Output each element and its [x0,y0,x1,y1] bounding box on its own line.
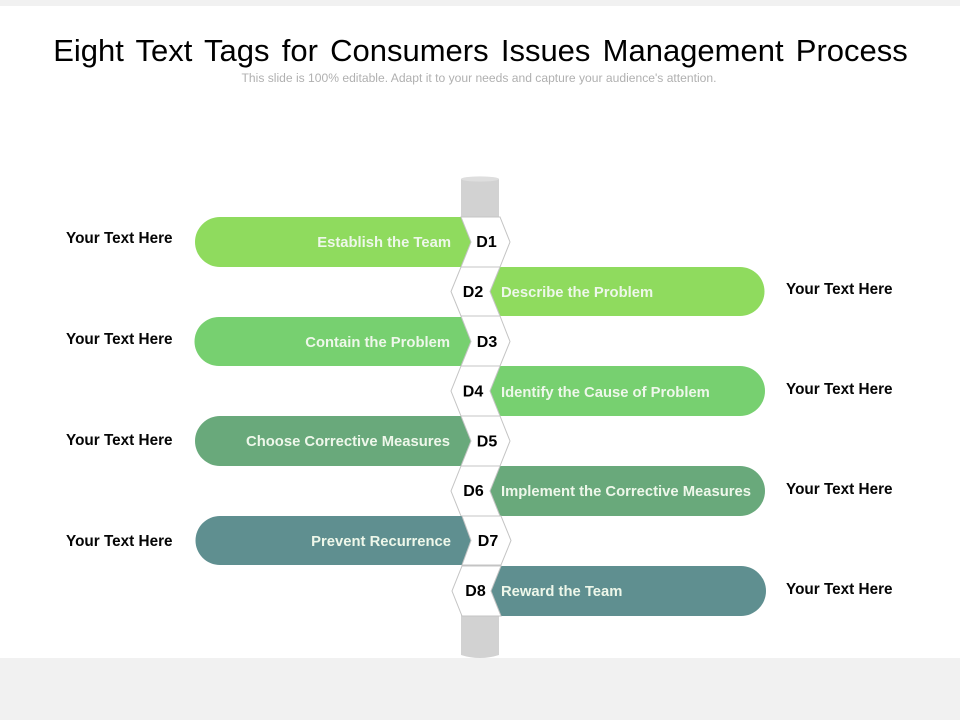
tag: D4 Identify the Cause of Problem: Identify the Cause of Problem [501,385,710,401]
tag: D6 Implement the Corrective Measures: D6 [463,483,484,500]
tag: D1 Establish the Team: D1 [476,234,497,251]
cylinder: top of central spine [461,176,499,218]
tag: D2 Describe the Problem [451,267,764,316]
tag: D2 Describe the Problem: Describe the Problem [501,285,653,301]
tag: D7 Prevent Recurrence: Prevent Recurrence [311,534,451,550]
tag: D8 Reward the Team: Reward the Team [501,584,622,600]
tag: D7 Prevent Recurrence [195,516,511,565]
right labels: Your Text Here [786,281,893,298]
tag: D8 Reward the Team: D8 [465,583,486,600]
tag: D3 Contain the Problem [194,316,510,366]
tag: D4 Identify the Cause of Problem [451,366,765,416]
subtitle: This slide is 100% editable. Adapt it to your needs and capture your audience's attention. [242,71,716,85]
cylinder: bottom of central spine [461,615,499,658]
left labels [66,230,173,550]
tag: D5 Choose Corrective Measures: D5 [477,434,497,450]
tag: D3 Contain the Problem: D3 [477,334,497,351]
right labels: Your Text Here [786,381,893,398]
right labels: Your Text Here [786,581,893,598]
left labels: Your Text Here [66,533,173,550]
tag: D7 Prevent Recurrence: D7 [478,533,498,550]
right labels: Your Text Here [786,481,893,498]
tag: D5 Choose Corrective Measures [195,416,510,466]
tag: D8 Reward the Team [452,566,766,616]
tag: D1 Establish the Team [195,217,510,267]
right labels [786,281,893,598]
tag: D3 Contain the Problem: Contain the Problem [305,335,450,351]
tag: D4 Identify the Cause of Problem: D4 [463,384,483,400]
tag: D6 Implement the Corrective Measures [451,466,765,516]
left labels: Your Text Here [66,331,173,348]
tag: D6 Implement the Corrective Measures: Implement the Corrective Measures [501,484,751,500]
tag: D1 Establish the Team: Establish the Team [317,235,451,251]
tag: D2 Describe the Problem: D2 [463,284,483,301]
title: Eight Text Tags for Consumers Issues Management Process [53,33,908,68]
left labels: Your Text Here [66,230,173,247]
tag: D5 Choose Corrective Measures: Choose Corrective Measures [246,434,450,450]
left labels: Your Text Here [66,432,173,449]
